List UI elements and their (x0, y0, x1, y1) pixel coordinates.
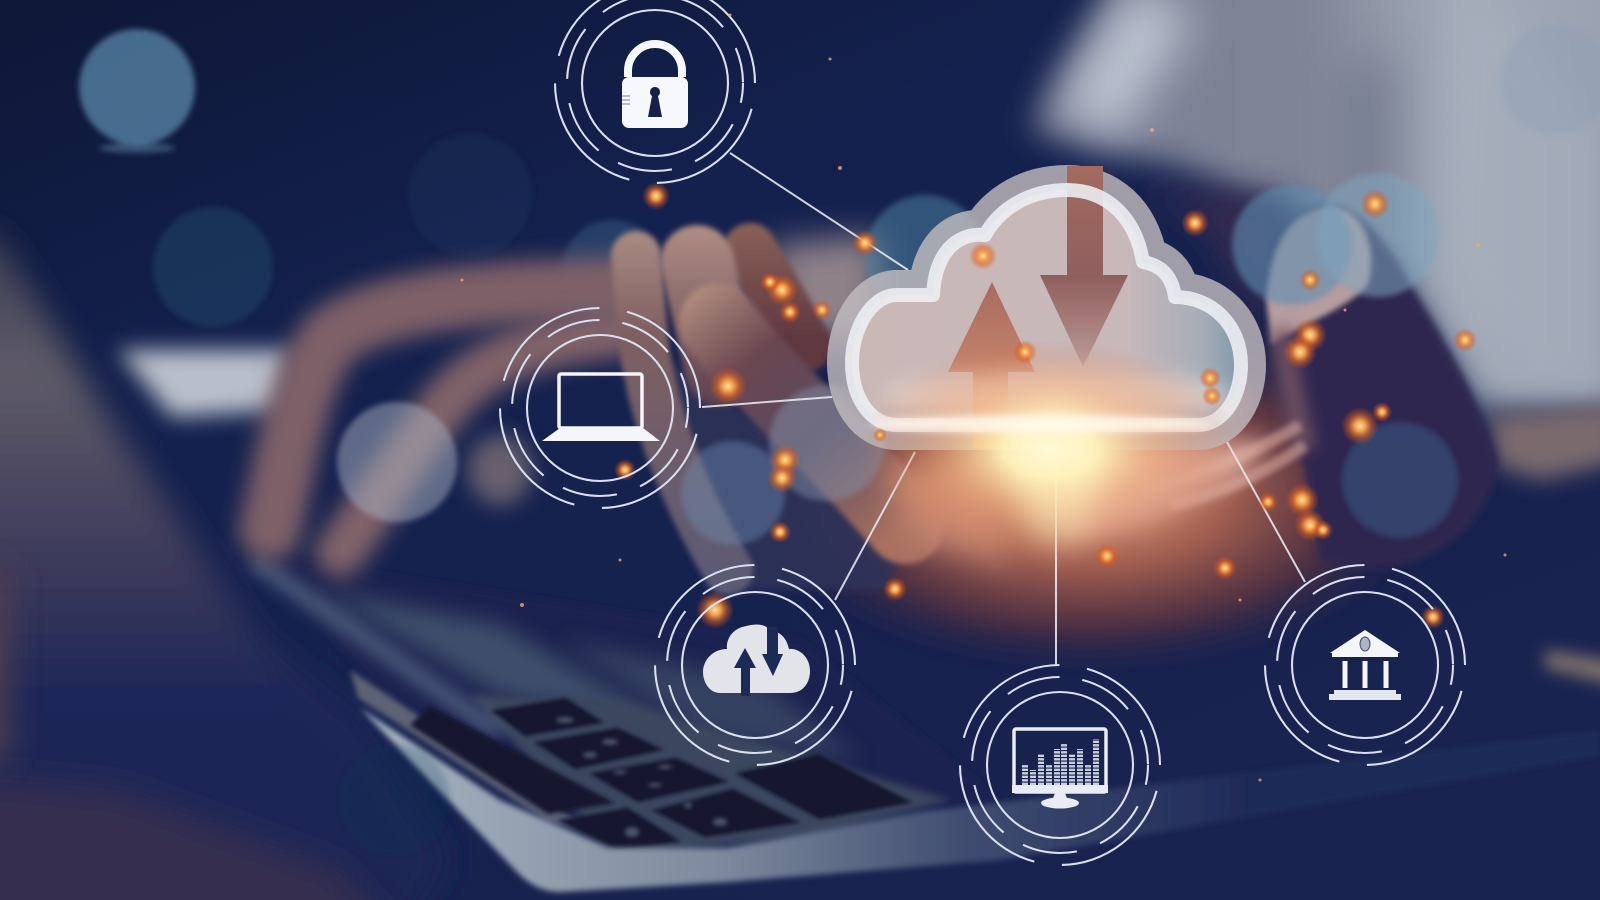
line to laptop (702, 397, 832, 407)
line to cloud icon (835, 452, 915, 600)
pinky finger (636, 256, 728, 570)
cloud outer band (852, 190, 1241, 425)
bars (1025, 739, 1096, 785)
icon badge: padlock (555, 0, 755, 183)
thumb lit tip (1266, 207, 1371, 345)
laptop lid in the foreground (0, 225, 450, 900)
line to bank (1227, 442, 1305, 582)
bokeh behind the fingers (562, 220, 662, 320)
forearm right (1490, 405, 1600, 480)
keyhole (648, 87, 662, 117)
table at the bottom left (0, 775, 400, 900)
lower taupe band (350, 670, 590, 830)
cloud interior (852, 190, 1241, 425)
monitor frame (1014, 729, 1106, 792)
hand dark underside (650, 345, 915, 590)
icon badge: cloud sync (655, 565, 855, 765)
space bar (410, 706, 615, 814)
shirt light column (1440, 0, 1600, 390)
bright cloud outline (852, 190, 1241, 425)
thumb lit edge (1282, 330, 1305, 450)
laptop base (542, 428, 660, 441)
tiny dust specks (460, 14, 1506, 782)
down arrow (762, 627, 783, 676)
padlock notches (622, 96, 630, 104)
main glow (860, 340, 1240, 560)
right thumb body (1268, 205, 1498, 569)
white paper behind the hand (118, 350, 292, 417)
icon badge: bank building (1265, 565, 1465, 765)
finger behind (750, 250, 805, 345)
orange sparks (614, 182, 1477, 629)
wrist lit (885, 460, 1010, 560)
bank roof medallion (1360, 637, 1370, 651)
padlock body (622, 77, 688, 128)
dark gap between cloud and thumb (1140, 195, 1290, 330)
keyboard side band (253, 560, 500, 733)
monitor chin (1012, 785, 1108, 793)
line to lock (730, 153, 908, 270)
icon badge: monitor with bar chart (960, 665, 1160, 865)
front finger (718, 322, 905, 525)
shirt bright fold (1085, 0, 1165, 125)
small cloud (703, 624, 810, 693)
typing hand second finger (340, 332, 620, 552)
keys (489, 697, 915, 852)
laptop screen (559, 374, 642, 428)
key legends (556, 717, 727, 837)
keyboard deck (255, 555, 1000, 850)
padlock shackle (628, 44, 682, 77)
monitor stand (1052, 793, 1068, 801)
upload arrow (948, 282, 1035, 448)
bank columns (1345, 661, 1386, 688)
soft haze in the cloud base (885, 372, 1235, 424)
arm behind hand (770, 235, 880, 340)
icon badge: laptop (500, 308, 700, 508)
light glow under the cloud (860, 340, 1240, 560)
lid warm edge (0, 570, 10, 760)
keyboard lit deck around the keys (470, 695, 950, 858)
bank roof (1330, 630, 1400, 653)
bank base (1329, 690, 1401, 700)
lens streak (870, 415, 1210, 433)
monitor foot (1041, 798, 1079, 808)
icon: central cloud with upload and download arrows (852, 166, 1241, 448)
shirt in the top right (1030, 0, 1600, 410)
blurred keys far away (320, 590, 680, 730)
bank roof band (1332, 653, 1398, 657)
shirt dark fold (1345, 60, 1395, 250)
blurred keys middle (560, 640, 860, 760)
connector lines (702, 153, 1305, 665)
download arrow (1040, 166, 1128, 367)
laptop front edge (360, 708, 1600, 892)
palm body (745, 317, 1435, 673)
middle finger (697, 262, 722, 370)
lit skin at the right of the glow (1070, 440, 1270, 540)
typing hand top finger (270, 288, 620, 530)
table ledge right (1545, 650, 1600, 686)
patch of light between fingers (468, 435, 532, 505)
up arrow (734, 648, 756, 696)
vertical beam (1016, 405, 1096, 545)
line to monitor (1055, 450, 1057, 665)
palm creases (1140, 425, 1305, 505)
